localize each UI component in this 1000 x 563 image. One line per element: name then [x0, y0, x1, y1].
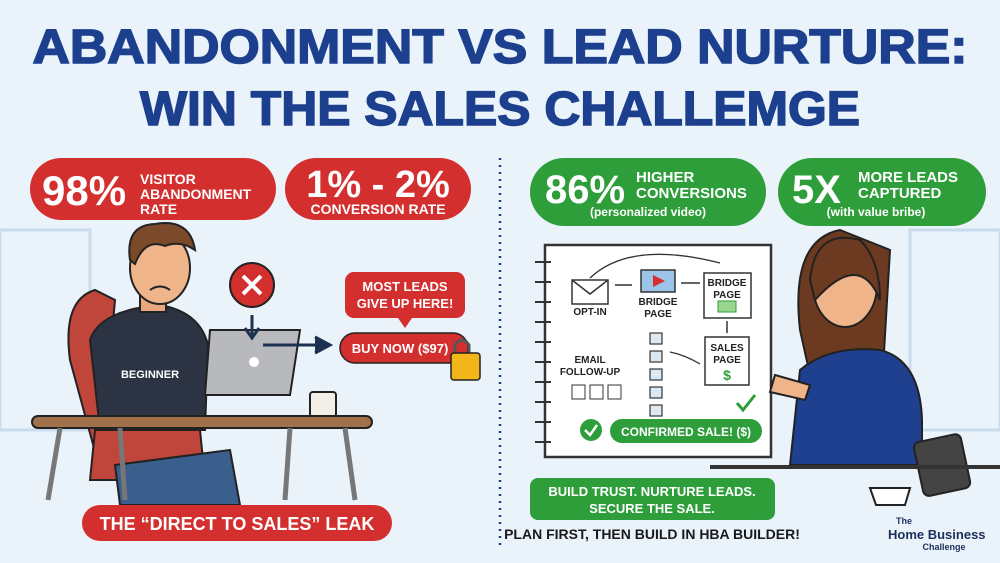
stat pill: conversion rate: CONVERSION RATE — [310, 201, 446, 217]
notebook: nurture funnel: BRIDGE — [708, 278, 747, 289]
stat pill: 86% higher conversions: CONVERSIONS — [636, 185, 747, 202]
text: plan first: PLAN FIRST, THEN BUILD IN HBA BUILDER! — [504, 526, 800, 542]
callout: build trust: SECURE THE SALE. — [589, 501, 715, 516]
title: ABANDONMENT VS LEAD NURTURE: — [32, 21, 968, 74]
notebook: nurture funnel: $ — [723, 367, 731, 383]
callout: most leads give up: MOST LEADS — [362, 279, 448, 294]
illustration: smiling woman — [770, 230, 971, 505]
arrow: down — [245, 315, 259, 338]
stat pill: 5X more leads: (with value bribe) — [827, 205, 925, 219]
stat pill: 98% abandonment: 98% — [42, 167, 126, 214]
title: WIN THE SALES CHALLEMGE — [140, 83, 860, 136]
stat pill: 98% abandonment: VISITOR — [140, 171, 196, 187]
notebook: nurture funnel: BRIDGE — [639, 297, 678, 308]
notebook: nurture funnel: OPT-IN — [573, 307, 607, 318]
title — [32, 21, 968, 136]
divider — [499, 158, 501, 545]
notebook: nurture funnel: PAGE — [644, 309, 672, 320]
label: direct to sales leak: THE “DIRECT TO SALES” LEAK — [100, 514, 374, 534]
stat pill: 98% abandonment: RATE — [140, 201, 177, 217]
notebook: nurture funnel: CONFIRMED SALE! ($) — [621, 425, 751, 439]
stat pill: 5X more leads — [778, 158, 986, 226]
stat pill: 86% higher conversions: (personalized video) — [590, 205, 706, 219]
notebook: nurture funnel — [535, 245, 771, 457]
stat pill: 5X more leads: CAPTURED — [858, 185, 942, 202]
icon: red x — [230, 263, 274, 307]
notebook: nurture funnel: SALES — [710, 343, 744, 354]
illustration: beginner at desk — [32, 223, 372, 505]
stat pill: 86% higher conversions — [530, 158, 766, 226]
button: buy now: BUY NOW ($97) — [352, 341, 448, 356]
notebook: nurture funnel: EMAIL — [574, 355, 606, 366]
logo: home business challenge: Challenge — [922, 542, 966, 552]
callout: build trust: BUILD TRUST. NURTURE LEADS. — [548, 484, 756, 499]
stat pill: 5X more leads: MORE LEADS — [858, 169, 958, 186]
logo: home business challenge: Home Business — [888, 527, 986, 542]
callout: most leads give up — [345, 272, 465, 328]
stat pill: 98% abandonment: ABANDONMENT — [140, 186, 252, 202]
illustration: beginner at desk: BEGINNER — [121, 369, 179, 381]
stat pill: 86% higher conversions: HIGHER — [636, 169, 695, 186]
button: buy now — [340, 333, 480, 380]
arrow: right — [263, 337, 330, 353]
label: direct to sales leak — [82, 505, 392, 541]
notebook: nurture funnel: PAGE — [713, 290, 741, 301]
stat pill: 5X more leads: 5X — [792, 168, 841, 212]
logo: home business challenge: The — [896, 516, 912, 526]
callout: build trust — [530, 478, 775, 520]
notebook: nurture funnel: FOLLOW-UP — [560, 367, 620, 378]
stat pill: 86% higher conversions: 86% — [545, 168, 625, 212]
stat pill: conversion rate — [285, 158, 471, 220]
notebook: nurture funnel: PAGE — [713, 355, 741, 366]
logo: home business challenge — [888, 516, 986, 552]
callout: most leads give up: GIVE UP HERE! — [357, 296, 453, 311]
stat pill: conversion rate: 1% - 2% — [306, 164, 450, 206]
stat pill: 98% abandonment — [30, 158, 276, 220]
